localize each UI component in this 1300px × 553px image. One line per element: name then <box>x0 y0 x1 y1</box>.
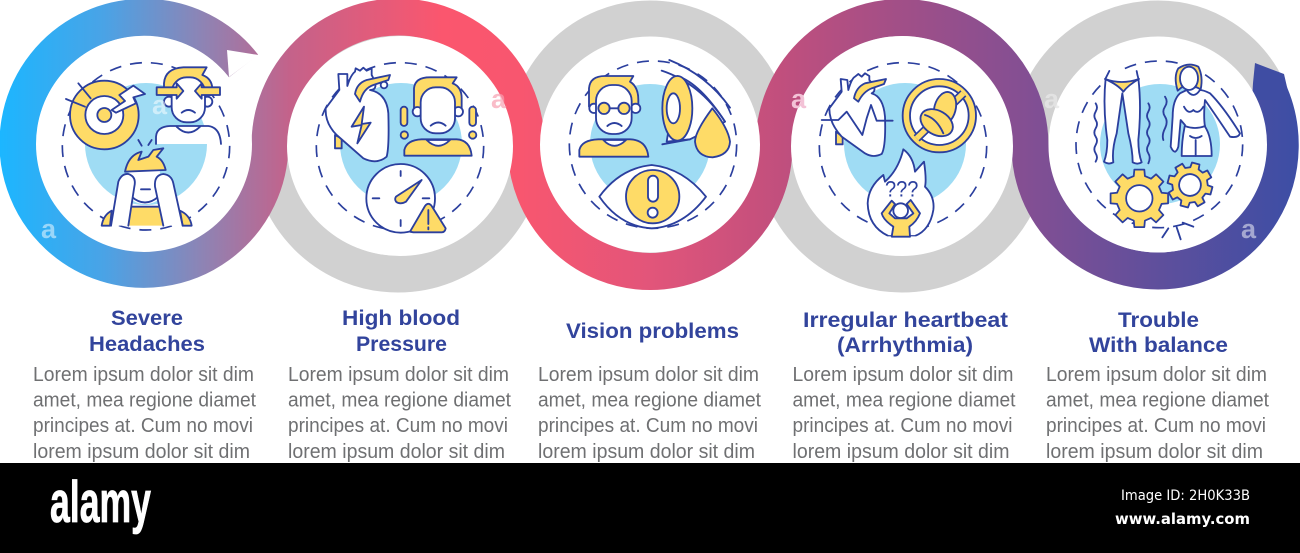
icon: eye with tear drop <box>662 60 730 157</box>
icon: target with lightning <box>66 81 145 149</box>
body text: lorem ipsum dolor sit dim <box>792 441 1010 463</box>
column: high blood pressure <box>288 307 511 463</box>
icon: heart with lightning <box>326 68 390 161</box>
column: severe headaches <box>33 307 256 463</box>
column: vision problems <box>538 320 761 463</box>
icon: heart with pulse line <box>822 73 893 156</box>
icon: pressure gauge with warning <box>366 164 446 233</box>
heading: With balance <box>1089 334 1228 357</box>
icon: eye with exclamation <box>599 165 706 228</box>
watermark letters: a <box>791 84 807 114</box>
heading <box>89 307 205 356</box>
white inner discs <box>36 36 1267 256</box>
grey background rings <box>270 18 1268 274</box>
watermark letters: a <box>152 90 168 120</box>
icon: squinting man <box>156 67 221 144</box>
heading <box>803 309 1008 357</box>
watermark letters: a <box>1241 214 1257 244</box>
watermark letters: a <box>1044 84 1060 114</box>
heading: Pressure <box>356 333 447 356</box>
body text: amet, mea regione diamet <box>792 390 1016 412</box>
body text: principes at. Cum no movi <box>33 415 253 437</box>
heading: (Arrhythmia) <box>837 334 973 357</box>
body text: principes at. Cum no movi <box>792 415 1012 437</box>
alamy logo: alamy <box>50 470 151 535</box>
body text: Lorem ipsum dolor sit dim <box>288 364 509 386</box>
footer bar <box>0 463 1300 553</box>
heading <box>1089 309 1228 357</box>
body text: amet, mea regione diamet <box>33 390 256 412</box>
icon: worried man <box>401 77 476 156</box>
body text: Lorem ipsum dolor sit dim <box>1046 364 1267 386</box>
icon: man with glasses <box>579 76 648 157</box>
body text: lorem ipsum dolor sit dim <box>288 441 505 463</box>
icon: person in flames with question marks: ??? <box>885 177 918 202</box>
body text <box>538 364 761 463</box>
body text: principes at. Cum no movi <box>1046 415 1266 437</box>
body text: Lorem ipsum dolor sit dim <box>792 364 1014 386</box>
gradient ribbon with arrow head <box>18 17 1290 272</box>
watermark letters: a <box>41 214 57 244</box>
icon group: vision problems <box>569 60 737 228</box>
icon group: severe headaches <box>62 63 230 230</box>
heading: Trouble <box>1118 309 1199 332</box>
heading: Headaches <box>89 333 205 356</box>
light blue discs <box>85 83 1220 205</box>
heading: Irregular heartbeat <box>803 309 1008 332</box>
heading: Severe <box>111 307 183 330</box>
icon: spark lines <box>1162 223 1193 239</box>
icon: no coffee <box>903 79 976 152</box>
icon: person holding head <box>102 140 192 226</box>
heading: Vision problems <box>566 320 739 343</box>
body text: amet, mea regione diamet <box>288 390 511 412</box>
column: trouble with balance <box>1046 309 1269 463</box>
icon: small gear <box>1163 158 1217 212</box>
body text: Lorem ipsum dolor sit dim <box>33 364 254 386</box>
body text <box>288 364 511 463</box>
watermark letters <box>41 84 1257 244</box>
body text: Lorem ipsum dolor sit dim <box>538 364 759 386</box>
image id: Image ID: 2H0K33B <box>1121 488 1250 504</box>
body text: amet, mea regione diamet <box>1046 390 1269 412</box>
watermark letters: a <box>491 84 507 114</box>
body text: principes at. Cum no movi <box>288 415 508 437</box>
heading <box>342 307 460 356</box>
icon: person in flames with question marks <box>868 149 934 237</box>
column: irregular heartbeat <box>792 309 1016 463</box>
icon: large gear <box>1111 170 1168 227</box>
icon group: irregular heartbeat <box>819 63 987 237</box>
heading: High blood <box>342 307 460 330</box>
body text: lorem ipsum dolor sit dim <box>538 441 755 463</box>
icon group: trouble with balance <box>1076 61 1243 239</box>
body text: lorem ipsum dolor sit dim <box>1046 441 1263 463</box>
icon group: high blood pressure <box>316 63 484 233</box>
body text <box>1046 364 1269 463</box>
body text: principes at. Cum no movi <box>538 415 758 437</box>
body text: lorem ipsum dolor sit dim <box>33 441 250 463</box>
body text <box>792 364 1016 463</box>
body text <box>33 364 256 463</box>
icon: woman <box>1171 65 1240 156</box>
website: www.alamy.com <box>1115 510 1250 528</box>
body text: amet, mea regione diamet <box>538 390 761 412</box>
icon: legs <box>1094 71 1167 164</box>
